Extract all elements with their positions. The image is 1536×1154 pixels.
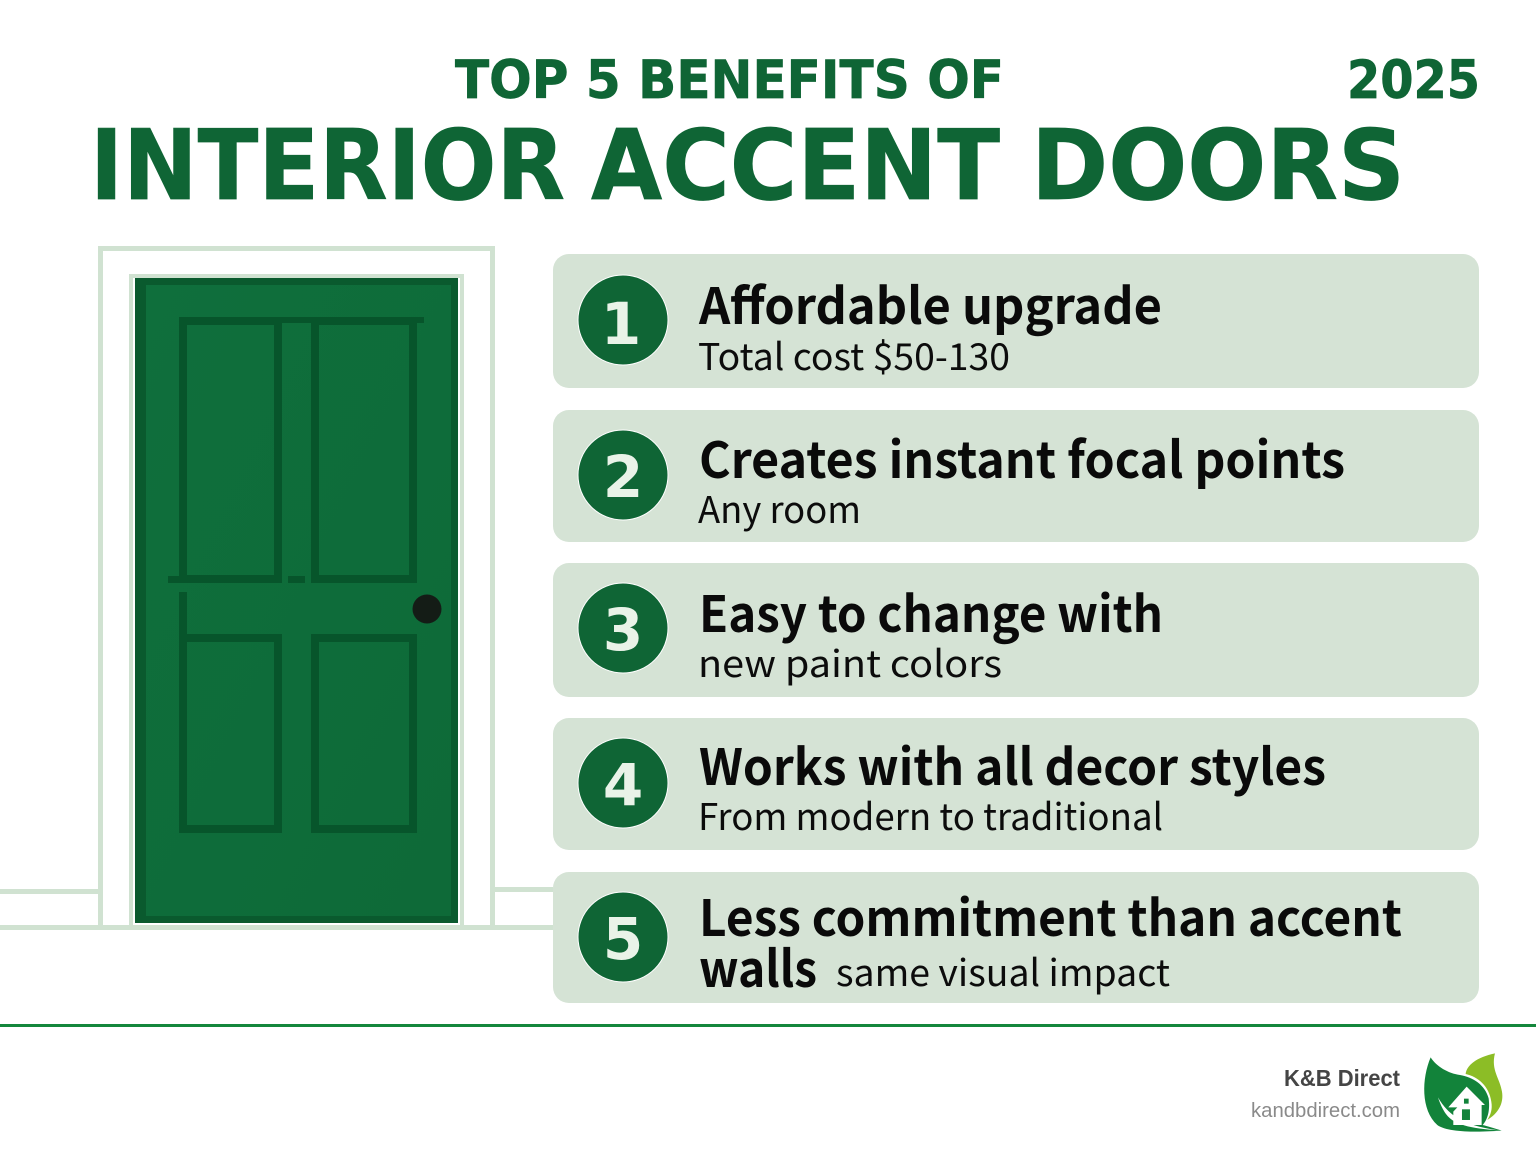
brand website: kandbdirect.com [1251,1100,1400,1122]
benefit 2 detail: Any room [698,480,861,534]
number badge 3 [578,583,668,673]
door panel: bottom right [315,638,413,829]
benefit 2 heading: Creates instant focal points [699,421,1345,493]
icon: door knob [412,594,442,624]
heading: interior accent doors: DOORS [1031,109,1405,222]
number badge 5 [578,892,668,982]
number badge 3: 3 [603,596,643,664]
number badge 4 [578,738,668,828]
door panel: top left [183,321,278,579]
panel: benefit 1 [553,254,1479,388]
heading: interior accent doors: INTERIOR [90,109,565,222]
panel: benefit 2 [553,410,1479,542]
icon: K&B Direct house leaf logo [1424,1053,1502,1132]
panel: benefit 5 [553,872,1479,1003]
door panel: bottom left [183,638,278,829]
benefit 3 detail: new paint colors [698,634,1002,688]
door rail details [168,317,424,638]
number badge 4: 4 [603,751,643,819]
heading: top 5 benefits of: TOP 5 BENEFITS OF [455,50,1004,111]
door panel: top right [315,321,413,579]
panel: benefit 3 [553,563,1479,697]
benefit 4 detail: From modern to traditional [698,787,1163,841]
footer brand text [1251,1065,1400,1122]
number badge 1: 1 [601,290,641,358]
door slab [135,278,458,923]
number badge 2: 2 [603,443,643,511]
panel: benefit 4 [553,718,1479,850]
benefit 5 heading line 2: walls [699,930,817,1002]
title [90,50,1480,222]
benefit 1 detail: Total cost $50-130 [698,327,1010,381]
benefit 5 detail: same visual impact [836,943,1170,997]
benefit 4 heading: Works with all decor styles [699,728,1326,800]
number badge 5: 5 [603,905,643,973]
baseboard [0,887,553,930]
heading: interior accent doors: ACCENT [591,109,1000,222]
number badge 2 [578,430,668,520]
brand name: K&B Direct [1284,1065,1400,1091]
door frame [98,246,495,930]
benefit 3 heading: Easy to change with [699,575,1163,647]
heading: interior accent doors [90,109,1405,222]
benefit 1 heading: Affordable upgrade [698,267,1162,339]
number badge 1 [578,275,668,365]
heading: year: 2025 [1347,50,1480,111]
benefit 5 heading line 1: Less commitment than accent [699,879,1402,951]
footer divider [0,1024,1536,1027]
door illustration [0,246,553,930]
